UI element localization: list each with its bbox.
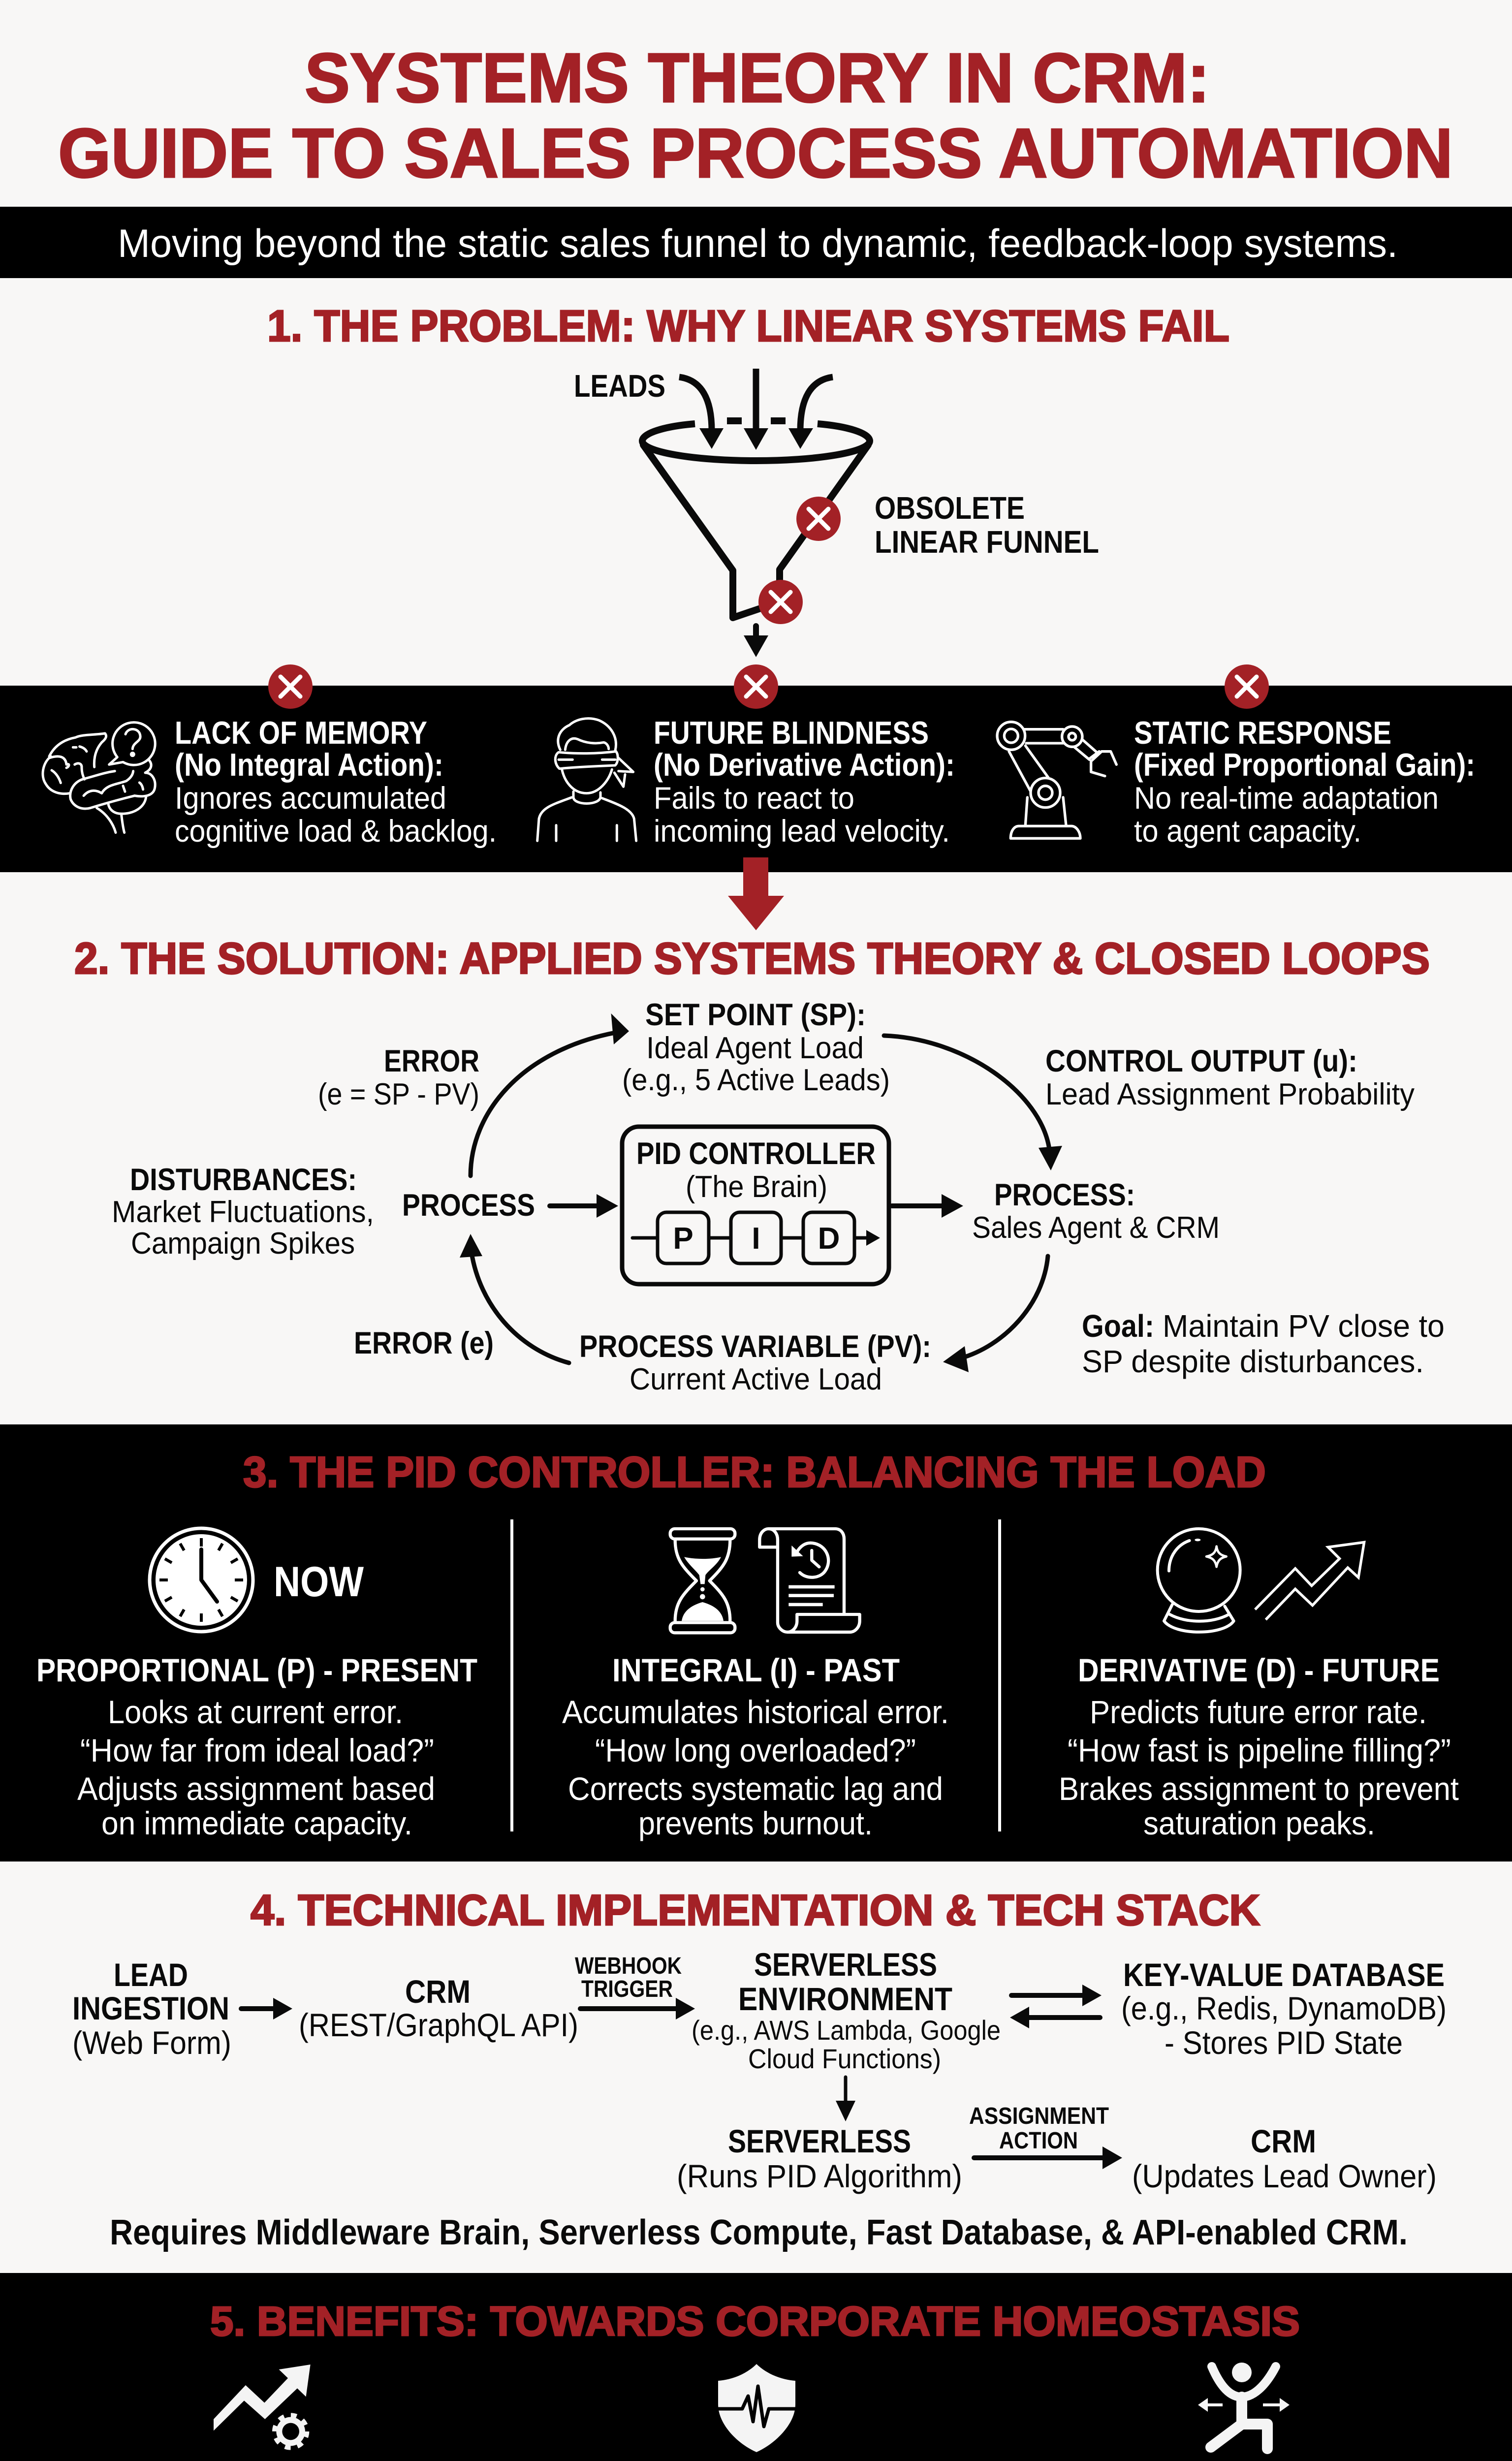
loop arrow: set point to process [884, 1036, 1062, 1170]
set point: Ideal Agent Load [646, 1031, 864, 1065]
column: derivative [1059, 1652, 1459, 1841]
arrow: ingestion to CRM [241, 1998, 292, 2019]
badge: x three [1225, 664, 1269, 709]
text: lack of memory: cognitive load & backlog. [175, 814, 497, 849]
error label [318, 1044, 479, 1111]
process output: PROCESS: [994, 1178, 1135, 1212]
node: lead ingestion: (Web Form) [72, 2024, 231, 2061]
column: derivative: “How fast is pipeline filling?” [1068, 1732, 1451, 1768]
icon: robot arm [997, 722, 1116, 838]
icon: funnel [642, 421, 870, 618]
set point [622, 998, 890, 1097]
loop arrow: process to set point [471, 1013, 630, 1176]
PID controller box: I [752, 1222, 760, 1256]
panel: failure causes [0, 664, 1512, 872]
icon: crystal ball [1158, 1529, 1240, 1632]
node: CRM API [299, 1973, 578, 2043]
node: CRM API: (REST/GraphQL API) [299, 2007, 578, 2043]
badge: x one [268, 664, 313, 709]
column: proportional: Looks at current error. [108, 1694, 403, 1730]
disturbances [112, 1163, 374, 1261]
icon: blindfolded person [537, 719, 636, 841]
tech stack flow [72, 1946, 1447, 2252]
PID controller box: P [673, 1222, 693, 1256]
requirements note: Requires Middleware Brain, Serverless Compute, Fast Database, & API-enabled CRM. [110, 2213, 1408, 2252]
set point: (e.g., 5 Active Leads) [622, 1063, 890, 1097]
control output: CONTROL OUTPUT (u): [1045, 1044, 1357, 1078]
node: key-value database: - Stores PID State [1165, 2024, 1403, 2061]
node: serverless environment: (e.g., AWS Lambda, Google [692, 2015, 1001, 2046]
process variable: Current Active Load [630, 1362, 882, 1396]
disturbances: Market Fluctuations, [112, 1195, 374, 1229]
node: CRM owner: CRM [1251, 2123, 1316, 2159]
title: SYSTEMS THEORY IN CRM: [305, 39, 1210, 117]
icon: rising trend arrow [1255, 1542, 1364, 1620]
subtitle band: Moving beyond the static sales funnel to dynamic, feedback-loop systems. [118, 221, 1398, 266]
text: static response: No real-time adaptation [1134, 781, 1439, 816]
label: leads: LEADS [574, 368, 665, 404]
label: obsolete linear funnel [875, 490, 1099, 560]
node: CRM API: CRM [405, 1973, 471, 2010]
process variable [579, 1329, 931, 1396]
arrow: funnel output [744, 626, 768, 657]
icon: lead arrows [679, 369, 833, 450]
column: derivative: Predicts future error rate. [1090, 1694, 1427, 1730]
node: serverless PID [677, 2123, 962, 2194]
panel: benefits [0, 2273, 1512, 2461]
icon: clock [150, 1528, 253, 1632]
PID controller box: D [818, 1222, 840, 1256]
node: CRM owner [1132, 2123, 1437, 2194]
heading: section 1: 1. THE PROBLEM: WHY LINEAR SYSTEMS FAIL [267, 302, 1229, 351]
arrow label: assignment action: ASSIGNMENT [969, 2103, 1109, 2129]
text: future blindness [654, 715, 955, 849]
text: future blindness: FUTURE BLINDNESS [654, 715, 929, 751]
error label: (e = SP - PV) [318, 1077, 479, 1111]
control output: Lead Assignment Probability [1045, 1077, 1415, 1111]
arrow label: assignment action [969, 2103, 1109, 2154]
PID controller box: PID CONTROLLER [636, 1136, 876, 1171]
error label: ERROR [384, 1044, 479, 1078]
column: proportional: on immediate capacity. [101, 1805, 412, 1841]
text: static response [1134, 715, 1475, 849]
node: key-value database [1121, 1956, 1447, 2061]
arrow: problem to solution [728, 857, 784, 930]
label: now: NOW [274, 1558, 364, 1606]
node: lead ingestion [72, 1956, 231, 2061]
arrow label: webhook trigger [575, 1953, 682, 2002]
heading: section 5: 5. BENEFITS: TOWARDS CORPORATE HOMEOSTASIS [210, 2298, 1300, 2344]
column: integral [562, 1652, 949, 1841]
icon: brain with question mark [43, 723, 155, 833]
column: proportional: “How far from ideal load?” [80, 1732, 434, 1768]
node: serverless PID: (Runs PID Algorithm) [677, 2158, 962, 2194]
node: lead ingestion: INGESTION [72, 1990, 229, 2026]
process output [972, 1178, 1220, 1245]
arrow: webhook [580, 1998, 695, 2019]
title: GUIDE TO SALES PROCESS AUTOMATION [58, 114, 1453, 192]
node: serverless environment: ENVIRONMENT [738, 1981, 952, 2017]
arrow: environment to serverless [836, 2077, 855, 2121]
arrow: process to PID [550, 1194, 618, 1218]
goal note [1082, 1308, 1445, 1379]
icon: shield with pulse [718, 2364, 795, 2452]
node: serverless environment [692, 1946, 1001, 2074]
badge: funnel spout x [758, 580, 803, 624]
loop arrow: variable to process [460, 1234, 569, 1363]
disturbances: Campaign Spikes [131, 1227, 355, 1261]
loop arrow: process to variable [943, 1256, 1048, 1372]
heading: section 3: 3. THE PID CONTROLLER: BALANCING THE LOAD [243, 1448, 1266, 1496]
column: proportional [36, 1652, 477, 1841]
text: future blindness: incoming lead velocity. [654, 814, 950, 849]
heading: section 4: 4. TECHNICAL IMPLEMENTATION & TECH STACK [251, 1886, 1260, 1934]
text: future blindness: (No Derivative Action): [654, 747, 955, 783]
column: integral: Corrects systematic lag and [568, 1770, 943, 1807]
node: serverless environment: Cloud Functions) [748, 2043, 941, 2074]
icon: adapting figure [1198, 2363, 1290, 2449]
node: CRM owner: (Updates Lead Owner) [1132, 2158, 1437, 2194]
node: lead ingestion: LEAD [114, 1956, 188, 1993]
node: serverless environment: SERVERLESS [754, 1946, 937, 1983]
goal note: SP despite disturbances. [1082, 1344, 1424, 1379]
column: proportional: PROPORTIONAL (P) - PRESENT [36, 1652, 477, 1688]
text: lack of memory: Ignores accumulated [175, 781, 446, 816]
arrow: assignment [974, 2146, 1122, 2169]
PID controller box [622, 1127, 889, 1284]
closed loop diagram [112, 998, 1445, 1396]
arrow label: webhook trigger: WEBHOOK [575, 1953, 682, 1979]
arrow label: webhook trigger: TRIGGER [581, 1976, 673, 2002]
control output [1045, 1044, 1415, 1111]
icon: trend with gear [214, 2365, 311, 2448]
text: lack of memory: (No Integral Action): [175, 747, 443, 783]
process output: Sales Agent & CRM [972, 1211, 1220, 1245]
subtitle band [0, 207, 1512, 278]
process variable: PROCESS VARIABLE (PV): [579, 1329, 931, 1364]
arrow label: assignment action: ACTION [999, 2128, 1078, 2154]
column: proportional: Adjusts assignment based [77, 1770, 435, 1807]
node: key-value database: (e.g., Redis, DynamoDB) [1121, 1990, 1447, 2026]
text: lack of memory [175, 715, 497, 849]
process input label: PROCESS [402, 1188, 535, 1223]
column: derivative: DERIVATIVE (D) - FUTURE [1078, 1652, 1440, 1688]
goal note: Maintain PV close to [1163, 1308, 1445, 1344]
text: static response: STATIC RESPONSE [1134, 715, 1391, 751]
node: key-value database: KEY-VALUE DATABASE [1123, 1956, 1445, 1993]
node: serverless PID: SERVERLESS [728, 2123, 911, 2159]
text: static response: to agent capacity. [1134, 814, 1361, 849]
arrows: database exchange [1010, 1985, 1102, 2028]
arrow: PID to process [892, 1194, 963, 1218]
column: derivative: Brakes assignment to prevent [1059, 1770, 1459, 1807]
text: future blindness: Fails to react to [654, 781, 854, 816]
label: obsolete linear funnel: OBSOLETE [875, 490, 1025, 526]
goal note: Goal: [1082, 1308, 1154, 1344]
column: integral: Accumulates historical error. [562, 1694, 949, 1730]
panel: PID controller terms [0, 1424, 1512, 1862]
title [58, 39, 1453, 192]
column: integral: “How long overloaded?” [595, 1732, 916, 1768]
set point: SET POINT (SP): [645, 998, 866, 1032]
column: integral: INTEGRAL (I) - PAST [612, 1652, 900, 1688]
icon: history scroll [759, 1529, 860, 1632]
disturbances: DISTURBANCES: [130, 1163, 357, 1197]
heading: section 2: 2. THE SOLUTION: APPLIED SYSTEMS THEORY & CLOSED LOOPS [74, 934, 1430, 983]
icon: hourglass [670, 1529, 735, 1633]
text: lack of memory: LACK OF MEMORY [175, 715, 427, 751]
badge: funnel wall x [796, 497, 841, 541]
error e label: ERROR (e) [354, 1326, 494, 1360]
funnel diagram [574, 368, 1099, 657]
badge: x two [734, 664, 778, 709]
column: integral: prevents burnout. [638, 1805, 873, 1841]
PID controller box: (The Brain) [686, 1170, 827, 1204]
column: derivative: saturation peaks. [1143, 1805, 1375, 1841]
label: obsolete linear funnel: LINEAR FUNNEL [875, 524, 1099, 560]
